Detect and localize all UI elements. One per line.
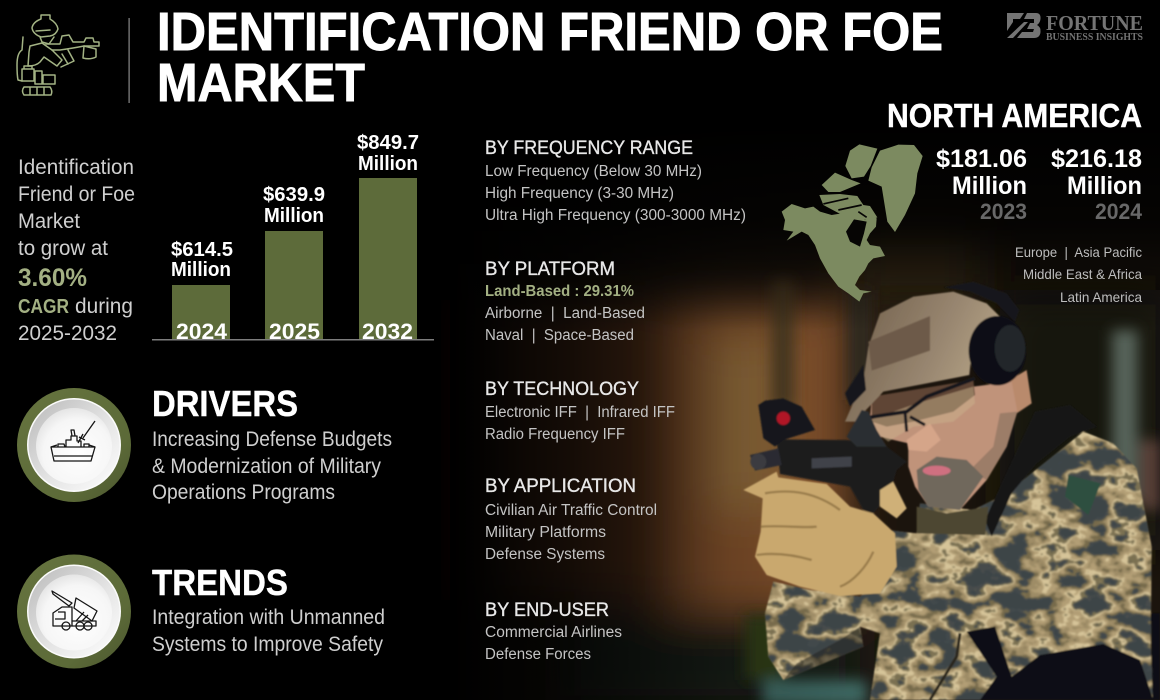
bar 2025: $639.9 bbox=[263, 184, 325, 206]
bar 2032: 2032 bbox=[362, 319, 413, 344]
value 2023: Million bbox=[952, 172, 1027, 200]
bar 2024 bbox=[171, 239, 233, 344]
text: trends description bbox=[152, 606, 385, 656]
text block: market growth summary: during bbox=[75, 295, 133, 318]
segment: by technology: Radio Frequency IFF bbox=[485, 426, 625, 443]
text block: market growth summary: Market bbox=[18, 210, 80, 233]
cap patch bbox=[868, 316, 930, 371]
segment: by application: Military Platforms bbox=[485, 524, 606, 541]
segment: by frequency range: Low Frequency (Below 30 MHz) bbox=[485, 163, 702, 180]
stubble on jaw bbox=[970, 412, 1017, 480]
text block: market growth summary bbox=[18, 156, 135, 345]
text block: market growth summary: 3.60% bbox=[18, 264, 87, 292]
title bbox=[157, 2, 943, 113]
head bbox=[845, 282, 1032, 510]
segment: by frequency range: High Frequency (3-30 MHz) bbox=[485, 185, 674, 202]
divider bbox=[128, 18, 130, 103]
lips bbox=[923, 466, 951, 476]
segment: by application: Civilian Air Traffic Control bbox=[485, 502, 657, 519]
bar 2032: Million bbox=[358, 153, 418, 175]
title: IDENTIFICATION FRIEND OR FOE bbox=[157, 2, 943, 62]
value 2023 bbox=[936, 145, 1027, 224]
segment: by frequency range: Ultra High Frequency (300-3000 MHz) bbox=[485, 207, 746, 224]
text: trends description: Systems to Improve Safety bbox=[152, 633, 383, 656]
text block: market growth summary: to grow at bbox=[18, 237, 108, 260]
bar 2032: $849.7 bbox=[357, 132, 419, 154]
panel: drivers bbox=[17, 383, 392, 504]
segment: by technology bbox=[485, 379, 675, 443]
bar 2025 bbox=[263, 184, 325, 344]
icon: soldier line art bbox=[17, 15, 99, 95]
other regions list: Middle East & Africa bbox=[1023, 266, 1142, 282]
gloved hands bbox=[743, 472, 907, 596]
segment: by platform: BY PLATFORM bbox=[485, 259, 615, 280]
segment: by platform bbox=[485, 259, 645, 344]
value 2024 bbox=[1051, 145, 1143, 224]
background photo: blurred setting behind soldier bbox=[450, 120, 1160, 700]
other regions list: Latin America bbox=[1060, 289, 1142, 305]
segment: by end-user bbox=[485, 600, 622, 663]
cap bbox=[845, 292, 1002, 422]
segment: by platform: Land-Based : 29.31% bbox=[485, 283, 634, 300]
bar 2025: 2025 bbox=[269, 319, 320, 344]
text: drivers description: Increasing Defense Budgets bbox=[152, 428, 392, 451]
soldier vest strap bbox=[985, 405, 1097, 537]
bar 2024: 2024 bbox=[176, 319, 228, 344]
segment: by application bbox=[485, 476, 657, 563]
bar chart: market size by year bbox=[152, 132, 434, 344]
heading: trends: TRENDS bbox=[152, 562, 288, 603]
photo: soldier aiming rifle bbox=[743, 282, 1160, 700]
value 2023: $181.06 bbox=[936, 145, 1027, 173]
segment: by end-user: BY END-USER bbox=[485, 600, 609, 621]
segment: by application: Defense Systems bbox=[485, 546, 605, 563]
text: drivers description bbox=[152, 428, 392, 504]
segment: by platform: Airborne | Land-Based bbox=[485, 305, 645, 322]
safety glasses bbox=[869, 378, 975, 442]
icon: missile launcher truck on plate bbox=[17, 554, 131, 668]
soldier collar bbox=[917, 507, 988, 535]
value 2024: 2024 bbox=[1095, 199, 1143, 224]
text block: market growth summary: Friend or Foe bbox=[18, 183, 135, 206]
soldier camouflage jacket bbox=[760, 427, 1157, 700]
panel: regional market values bbox=[887, 97, 1143, 305]
shaded brow bbox=[872, 380, 975, 427]
beard bbox=[917, 457, 983, 510]
other regions list bbox=[1015, 244, 1142, 305]
other regions list: Europe | Asia Pacific bbox=[1015, 244, 1142, 260]
map: North America bbox=[782, 144, 923, 302]
segment: by technology: BY TECHNOLOGY bbox=[485, 379, 639, 400]
bar 2024: Million bbox=[171, 259, 231, 281]
segment: by frequency range bbox=[485, 138, 746, 224]
bar 2024: $614.5 bbox=[171, 239, 233, 261]
text block: market growth summary: Identification bbox=[18, 156, 134, 179]
logo: Fortune Business Insights: BUSINESS INSIGHTS bbox=[1046, 32, 1143, 43]
text block: market growth summary: 2025-2032 bbox=[18, 322, 117, 345]
logo: Fortune Business Insights bbox=[1007, 11, 1143, 43]
heading: drivers: DRIVERS bbox=[152, 383, 298, 424]
icon: warship on plate bbox=[17, 388, 131, 502]
value 2023: 2023 bbox=[980, 199, 1027, 224]
bag and straps bbox=[930, 613, 1160, 700]
segment: by end-user: Commercial Airlines bbox=[485, 624, 622, 641]
segment: by technology: Electronic IFF | Infrared IFF bbox=[485, 404, 675, 421]
segment: by frequency range: BY FREQUENCY RANGE bbox=[485, 138, 693, 159]
nose bbox=[907, 423, 941, 452]
value 2024: Million bbox=[1067, 172, 1142, 200]
rifle bbox=[750, 398, 907, 513]
text block: market growth summary: CAGR bbox=[18, 296, 69, 318]
text: drivers description: Operations Programs bbox=[152, 481, 335, 504]
ear defenders bbox=[845, 282, 1026, 407]
value 2024: $216.18 bbox=[1051, 145, 1142, 173]
segment: by application: BY APPLICATION bbox=[485, 476, 636, 497]
far-arm shadow bbox=[783, 627, 863, 680]
face bbox=[870, 382, 1017, 510]
logo: Fortune Business Insights: FORTUNE bbox=[1046, 11, 1143, 35]
text: trends description: Integration with Unmanned bbox=[152, 606, 385, 629]
title: MARKET bbox=[157, 53, 365, 113]
segment: by end-user: Defense Forces bbox=[485, 646, 591, 663]
bar 2032 bbox=[357, 132, 419, 344]
patch on shoulder bbox=[1065, 475, 1101, 515]
heading: North America: NORTH AMERICA bbox=[887, 97, 1142, 134]
ear bbox=[1010, 370, 1032, 413]
panel: trends bbox=[17, 554, 385, 668]
segment: by platform: Naval | Space-Based bbox=[485, 327, 634, 344]
bar 2025: Million bbox=[264, 205, 324, 227]
text: drivers description: & Modernization of Military bbox=[152, 455, 381, 478]
